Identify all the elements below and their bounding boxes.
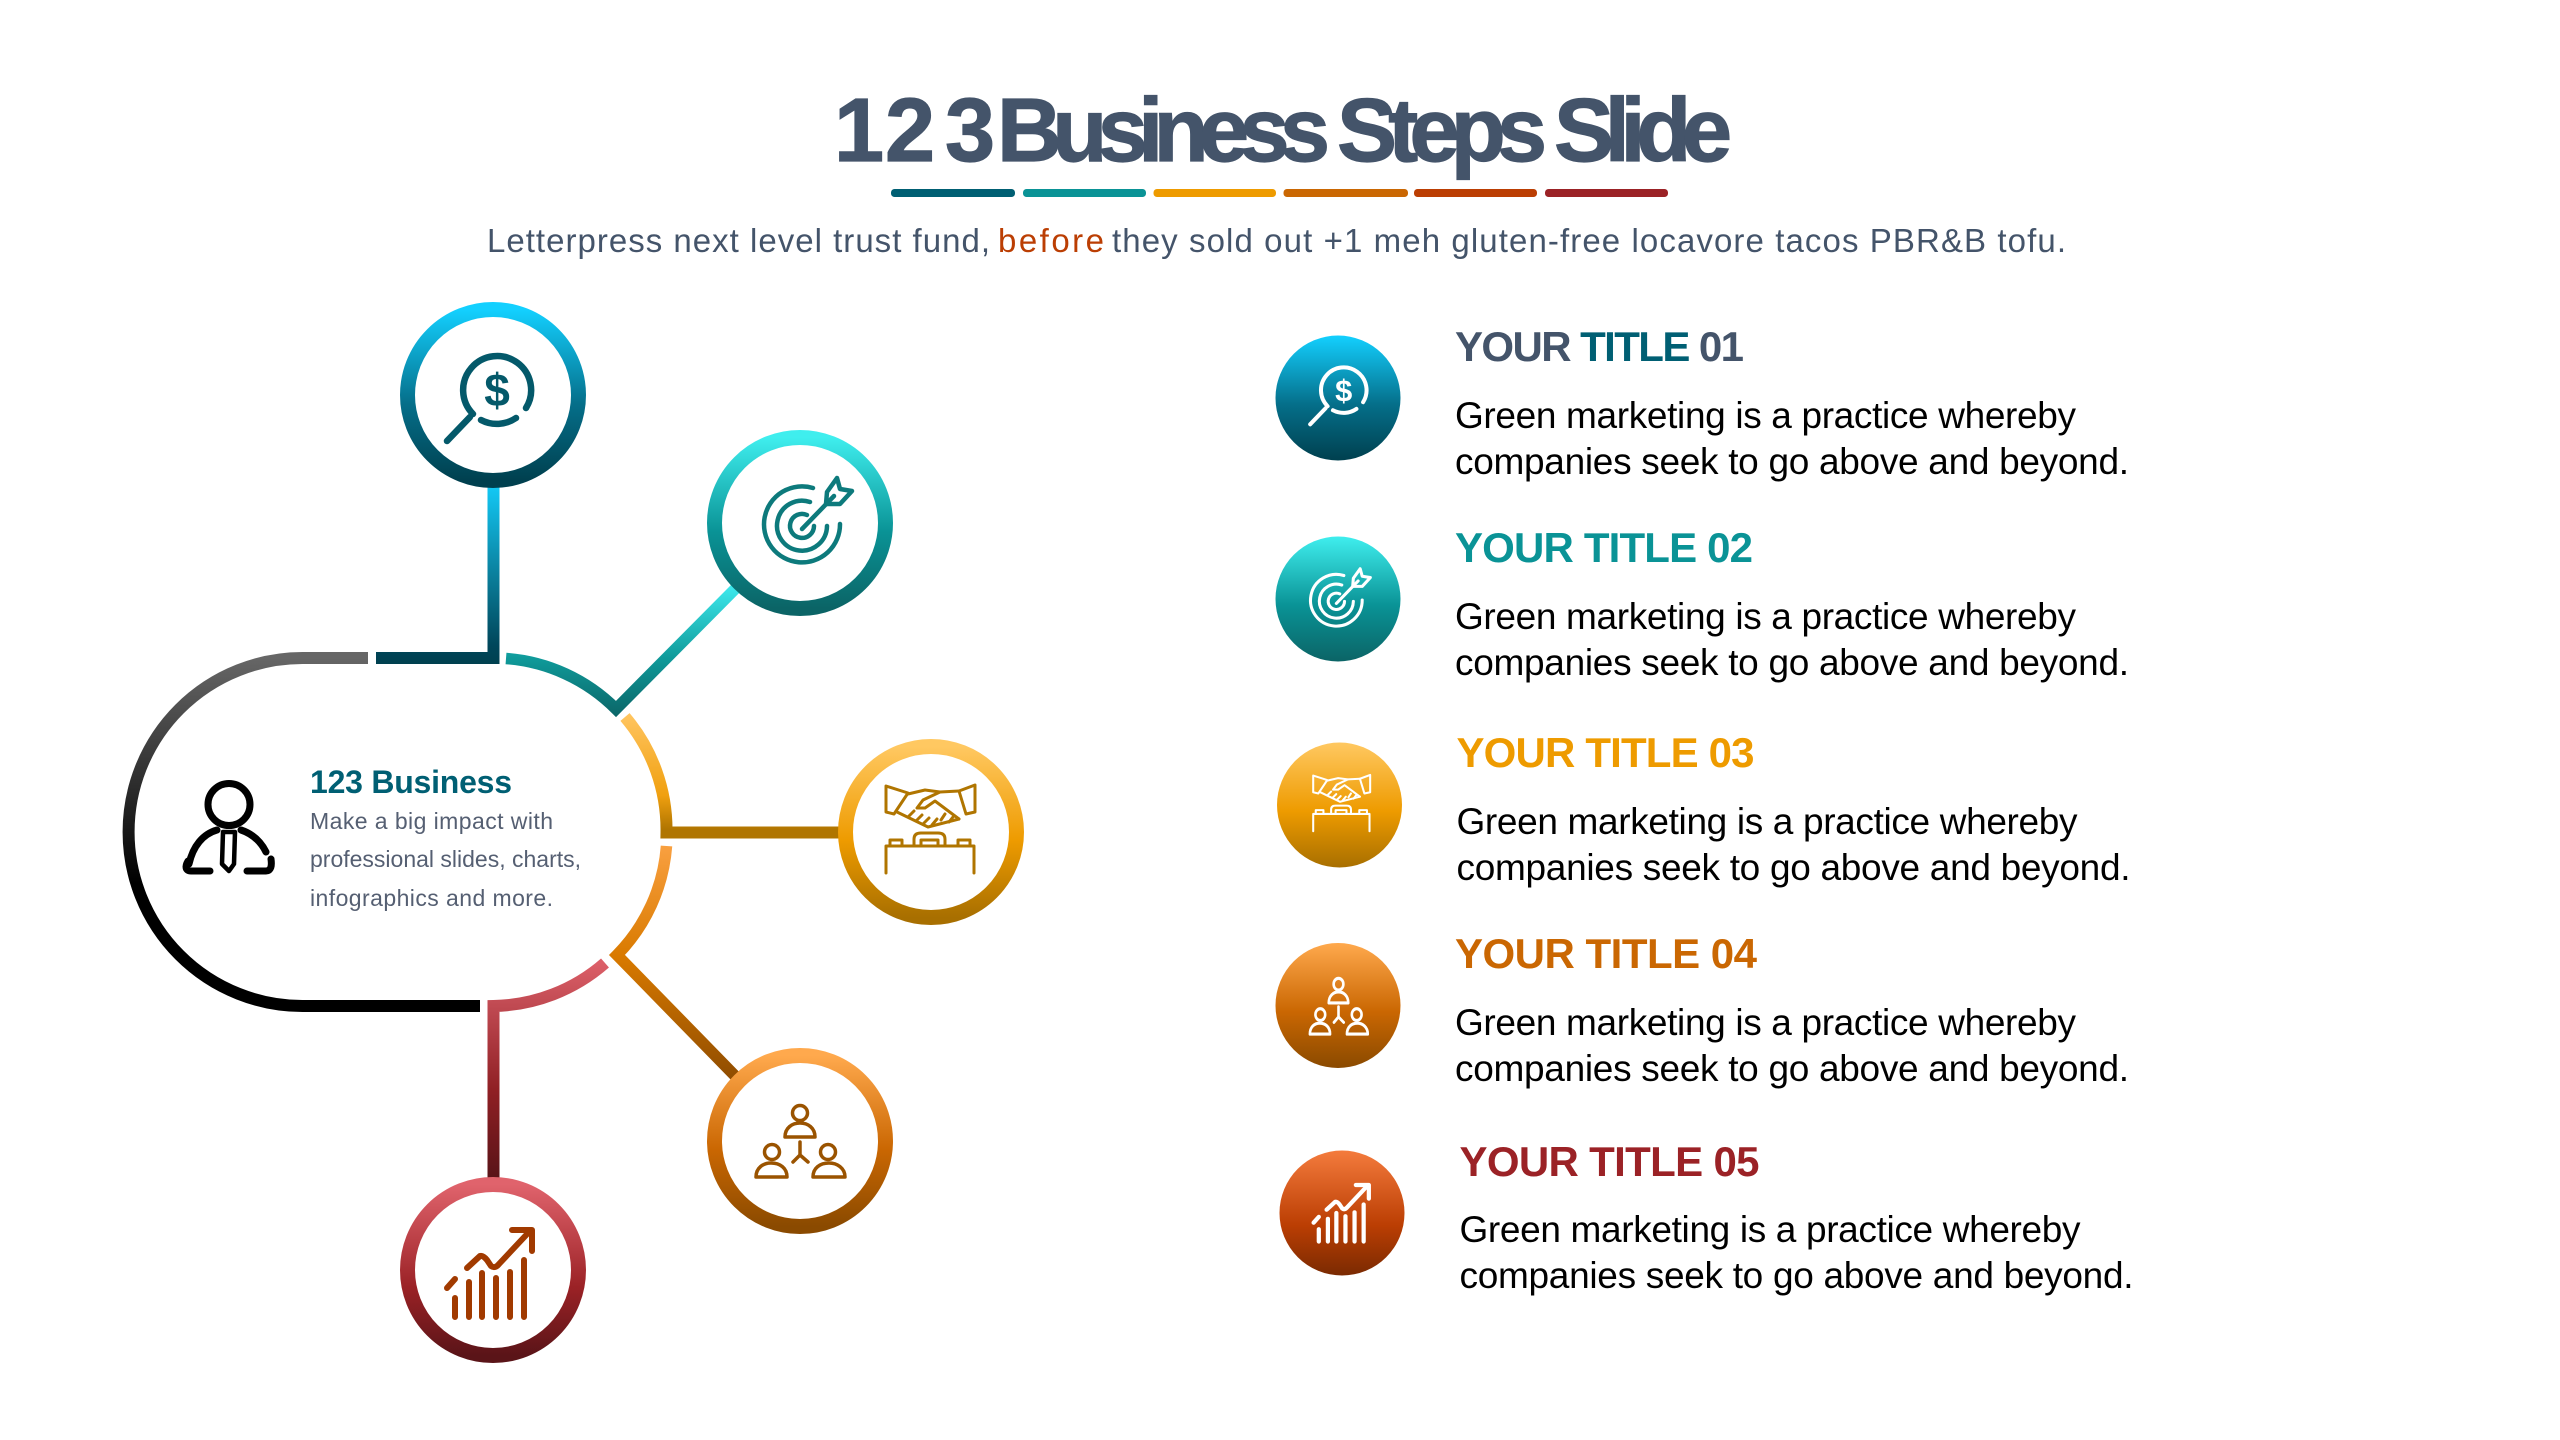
connector: step 5 [494, 963, 605, 1182]
connector: step 4 [617, 846, 742, 1083]
body 1: companies seek to go above and beyond. [1455, 441, 2129, 482]
body 1 [1455, 395, 2129, 482]
body 2: companies seek to go above and beyond. [1455, 642, 2129, 683]
body 4: Green marketing is a practice whereby [1455, 1002, 2076, 1043]
icon: dollar magnifier [447, 356, 531, 441]
badge 4 [1276, 943, 1400, 1068]
badge 5 [1280, 1150, 1404, 1276]
panel: hub diagram [129, 310, 1016, 1356]
badge 1: $ [1335, 373, 1352, 408]
node: step 5 [408, 1184, 578, 1356]
node: step 3 [846, 746, 1016, 918]
body 3: companies seek to go above and beyond. [1456, 847, 2130, 888]
hub description: infographics and more. [310, 885, 553, 911]
icon: growth chart [447, 1230, 532, 1317]
connector: step 2 [506, 582, 742, 709]
node: step 1 [408, 310, 578, 480]
list item 5 [1280, 1138, 2134, 1296]
subtitle: they sold out +1 meh gluten-free locavore tacos PBR&B tofu. [1112, 222, 2066, 259]
body 2 [1455, 596, 2129, 683]
body 1: Green marketing is a practice whereby [1455, 395, 2076, 436]
badge 1 [1276, 336, 1400, 460]
icon: handshake and briefcase [886, 785, 975, 873]
body 5: Green marketing is a practice whereby [1460, 1209, 2081, 1250]
heading 4: YOUR TITLE 04 [1455, 930, 1758, 977]
body 5: companies seek to go above and beyond. [1460, 1255, 2134, 1296]
node: step 2 [714, 438, 886, 608]
hub heading: 123 Business [310, 764, 512, 800]
list item 4 [1276, 930, 2129, 1089]
body 3: Green marketing is a practice whereby [1456, 801, 2078, 842]
title: Business [997, 81, 1330, 181]
hub outline: left segment [129, 658, 480, 1006]
icon: target [764, 478, 852, 562]
badge 3 [1277, 742, 1402, 868]
hub description: Make a big impact with [310, 808, 553, 834]
list item 3 [1277, 729, 2130, 888]
body 5 [1460, 1209, 2134, 1296]
hub description [310, 808, 581, 911]
title: Steps [1337, 81, 1547, 181]
hub description: professional slides, charts, [310, 846, 581, 872]
heading 3: YOUR TITLE 03 [1456, 729, 1754, 776]
heading 1: YOUR TITLE 01 [1455, 323, 1744, 370]
node: step 4 [714, 1056, 886, 1226]
body 4 [1455, 1002, 2129, 1089]
list item 2 [1276, 524, 2129, 683]
connector: step 1 [376, 480, 500, 664]
icon: businessman [186, 784, 271, 871]
badge 2 [1276, 536, 1400, 662]
body 4: companies seek to go above and beyond. [1455, 1048, 2129, 1089]
heading 2: YOUR TITLE 02 [1455, 524, 1753, 571]
title underline [891, 189, 1668, 197]
subtitle: Letterpress next level trust fund, [487, 222, 990, 259]
body 2: Green marketing is a practice whereby [1455, 596, 2076, 637]
title: Slide [1554, 81, 1732, 181]
body 3 [1456, 801, 2130, 888]
icon: dollar magnifier: $ [484, 364, 510, 416]
connector: step 3 [625, 717, 842, 832]
heading 5: YOUR TITLE 05 [1460, 1138, 1760, 1185]
title: 1 [834, 81, 884, 181]
icon: team hierarchy [756, 1106, 845, 1177]
list item 1 [1276, 323, 2129, 482]
subtitle: before [998, 222, 1104, 259]
title: 2 [885, 81, 935, 181]
title: 3 [945, 81, 995, 181]
